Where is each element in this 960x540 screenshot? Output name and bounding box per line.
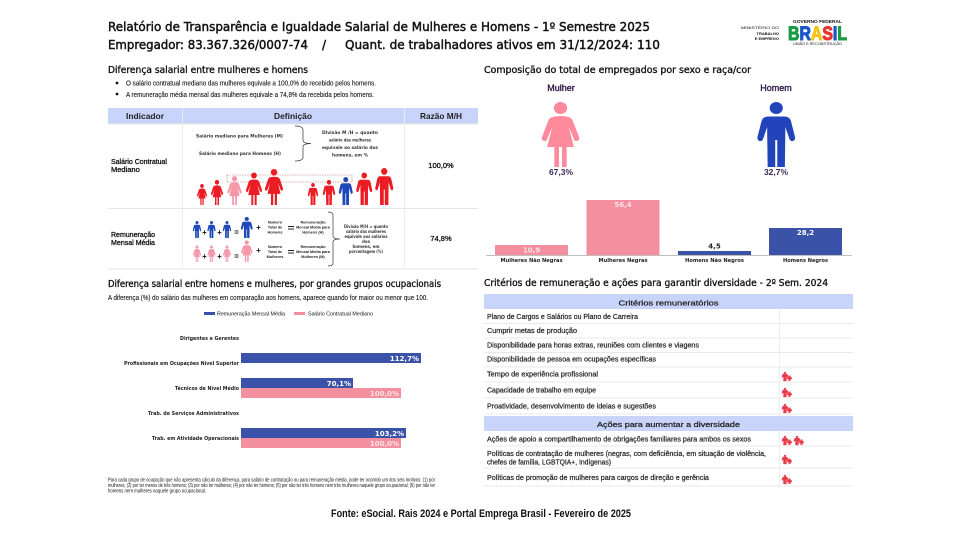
table: indicadores: 74,8% <box>430 234 452 243</box>
table: critérios e ações: Critérios remuneratórios <box>618 298 719 308</box>
bar chart: grupos ocupacionais: Trab. em Atividade Operacionais <box>152 436 240 442</box>
pictogram: mulher <box>542 83 579 177</box>
bar chart: grupos ocupacionais: 100,0% <box>370 390 399 398</box>
logo: ministério e governo federal: UNIÃO E RECONSTRUÇÃO <box>793 41 842 46</box>
pictogram: homem: 32,7% <box>764 167 788 177</box>
table: critérios e ações: Capacidade de trabalho em equipe <box>487 388 596 394</box>
title <box>108 20 660 52</box>
definição: remuneração mensal média: homens, em <box>352 244 380 250</box>
footnote: homens nem mulheres naquele grupo ocupacional. <box>108 488 206 494</box>
bar chart: grupos ocupacionais <box>124 312 421 448</box>
legend <box>204 312 373 318</box>
definição: remuneração mensal média: Remuneração <box>300 220 326 224</box>
title: Relatório de Transparência e Igualdade Salarial de Mulheres e Homens - 1º Semestre 2025 <box>108 20 650 34</box>
column chart: sexo e raça/cor: 10,9 <box>523 246 540 254</box>
icons: homem e mulher <box>782 372 804 484</box>
definição: remuneração mensal média: Remuneração <box>300 245 326 249</box>
title: / <box>322 38 327 52</box>
table: critérios e ações: Ações de apoio a compartilhamento de obrigações familiares para ambos os sexos <box>487 436 752 444</box>
definição: remuneração mensal média: Mulheres (M) <box>301 255 325 259</box>
logo: ministério e governo federal: GOVERNO FEDERAL <box>793 19 842 24</box>
definição: remuneração mensal média: = <box>234 228 239 237</box>
footnote <box>108 478 435 494</box>
definição: remuneração mensal média: + <box>217 228 222 237</box>
definição: remuneração mensal média: porcentagem (%) <box>349 249 383 255</box>
bar chart: grupos ocupacionais: Técnicos de Nível Médio <box>175 385 239 392</box>
source: Fonte: eSocial. Rais 2024 e Portal Emprega Brasil - Fevereiro de 2025 <box>331 508 631 520</box>
pictogram: mulher: 67,3% <box>549 167 573 177</box>
bar chart: grupos ocupacionais: 112,7% <box>390 355 419 363</box>
definição: remuneração mensal média: + <box>202 252 207 261</box>
table: indicadores: Salário Contratual <box>111 157 167 166</box>
summary bullets: O salário contratual mediano das mulheres equivale a 100,0% do recebido pelos homens. <box>126 78 376 88</box>
definição: remuneração mensal média: Total de <box>268 250 282 254</box>
footnote: mulheres; (2) por ter menos de três homens; (3) por não ter mulheres; (4) por não ter homens; (5) por não ter três homens nem três mulheres naquele grupo ocupacional; (6) por não ter <box>108 483 435 489</box>
bar chart: grupos ocupacionais: 103,2% <box>375 430 404 438</box>
column chart: sexo e raça/cor: 28,2 <box>797 229 814 237</box>
title: Empregador: 83.367.326/0007-74 <box>108 38 308 52</box>
column chart: sexo e raça/cor <box>486 200 852 264</box>
pictogram: mulher: Mulher <box>547 83 575 93</box>
definição: salário contratual mediano: Salário mediano para Mulheres (M) <box>196 132 283 140</box>
logo: ministério e governo federal: BRASIL <box>788 24 847 45</box>
subtitle: grupos ocupacionais: A diferença (%) do salário das mulheres em comparação aos homens, aparece quando for maior ou menor que 100. <box>108 293 428 302</box>
heading: diferença salarial: Diferença salarial entre mulheres e homens <box>108 65 308 76</box>
logo: ministério e governo federal: E EMPREGO <box>755 36 779 41</box>
column chart: sexo e raça/cor: Homens Não Negros <box>685 258 745 264</box>
definição: remuneração mensal média: salário das mulheres <box>346 228 386 235</box>
definição: remuneração mensal média: Homens <box>268 230 282 234</box>
heading: composição: Composição do total de empregados por sexo e raça/cor <box>484 65 751 76</box>
footnote: Para cada grupo de ocupação que não apresenta cálculo da diferença, para salário de contratação ou para remuneração média, pode ter ocorrido um dos seis motivos: (1) por <box>108 478 435 484</box>
table: critérios e ações: Ações para aumentar a diversidade <box>597 420 740 429</box>
table: indicadores: Razão M/H <box>420 111 462 121</box>
table: indicadores: Indicador <box>126 111 165 121</box>
table: critérios e ações: Disponibilidade para horas extras, reuniões com clientes e viagens <box>487 342 699 350</box>
table: indicadores: Definição <box>274 111 312 121</box>
table: critérios e ações: Cumprir metas de produção <box>487 328 577 335</box>
legend: Salário Contratual Mediano <box>308 312 373 318</box>
table: critérios e ações: chefes de família, LGBTQIA+, Indígenas) <box>487 460 611 466</box>
column chart: sexo e raça/cor: Mulheres Negras <box>598 258 648 264</box>
definição: remuneração mensal média: Mulheres <box>267 255 283 259</box>
definição: salário contratual mediano: salário das mulheres <box>329 136 371 144</box>
pictogram: homem <box>757 83 795 177</box>
definição: salário contratual mediano: homens, em % <box>332 152 368 158</box>
logo: ministério e governo federal: TRABALHO <box>757 31 779 36</box>
bar chart: grupos ocupacionais: Trab. de Serviços Administrativos <box>148 411 240 417</box>
table: indicadores: Mensal Média <box>111 238 156 247</box>
definição: salário contratual mediano: Salário mediano para Homens (H) <box>199 150 281 157</box>
definição: remuneração mensal média: Mensal Média para <box>296 250 331 254</box>
table: indicadores <box>108 108 478 269</box>
definição: remuneração mensal média: Número <box>268 220 283 224</box>
definição: remuneração mensal média: = <box>234 252 239 261</box>
logo: ministério e governo federal: MINISTÉRIO DO <box>741 25 779 30</box>
bar chart: grupos ocupacionais: Dirigentes e Gerentes <box>180 336 240 342</box>
table: critérios e ações <box>484 294 853 486</box>
definição: remuneração mensal média: equivale aos salários <box>344 233 388 240</box>
table: indicadores: Remuneração <box>111 230 155 239</box>
definição: remuneração mensal média: + <box>256 223 261 232</box>
definição: remuneração mensal média: + <box>202 228 207 237</box>
pictogram: homem: Homem <box>760 83 792 93</box>
definição: salário contratual mediano: equivale ao salário dos <box>322 144 378 151</box>
table: critérios e ações: Proatividade, desenvolvimento de ideias e sugestões <box>487 404 657 410</box>
bar chart: grupos ocupacionais: Profissionais em Ocupações Nível Superior <box>124 360 239 367</box>
table: critérios e ações: Tempo de experiência profissional <box>487 372 598 378</box>
table: critérios e ações: Plano de Cargos e Salários ou Plano de Carreira <box>487 314 638 321</box>
summary bullets <box>116 78 376 99</box>
table: critérios e ações: Políticas de contratação de mulheres (negras, com deficiência, em situação de violência, <box>487 451 766 458</box>
title: Quant. de trabalhadores ativos em 31/12/2024: 110 <box>345 38 660 52</box>
logo: ministério e governo federal <box>741 19 847 46</box>
definição: remuneração mensal média: Total de <box>268 226 282 230</box>
heading: critérios: Critérios de remuneração e ações para garantir diversidade - 2º Sem. 2024 <box>484 278 828 289</box>
definição: remuneração mensal média: Divisão M/H = quanto <box>344 224 388 230</box>
column chart: sexo e raça/cor: 4,5 <box>708 242 721 250</box>
table: critérios e ações: Políticas de promoção de mulheres para cargos de direção e gerência <box>487 475 709 482</box>
column chart: sexo e raça/cor: Mulheres Não Negras <box>500 258 563 264</box>
column chart: sexo e raça/cor: 56,4 <box>614 201 632 209</box>
definição: remuneração mensal média: Mensal Média para <box>296 226 331 230</box>
definição: remuneração mensal média: + <box>256 246 261 255</box>
definição: salário contratual mediano <box>196 126 393 205</box>
definição: remuneração mensal média: Número <box>268 245 283 249</box>
bar chart: grupos ocupacionais: 100,0% <box>370 440 399 448</box>
definição: remuneração mensal média: + <box>217 252 222 261</box>
summary bullets: A remuneração média mensal das mulheres equivale a 74,8% da recebida pelos homens. <box>126 90 374 99</box>
definição: remuneração mensal média: Homens (H) <box>302 230 324 234</box>
heading: por grandes grupos ocupacionais: Diferença salarial entre homens e mulheres, por grandes grupos ocupacionais <box>108 279 441 290</box>
table: indicadores: Mediano <box>111 165 140 174</box>
column chart: sexo e raça/cor: Homens Negros <box>783 258 829 264</box>
definição: remuneração mensal média: dos <box>362 239 370 245</box>
table: critérios e ações: Disponibilidade de pessoa em ocupações específicas <box>487 356 656 364</box>
bar chart: grupos ocupacionais: 70,1% <box>327 380 351 388</box>
definição: salário contratual mediano: Divisão M /H = quanto <box>322 130 378 136</box>
legend: Remuneração Mensal Média <box>217 312 285 318</box>
definição: remuneração mensal média <box>193 212 388 266</box>
table: indicadores: 100,0% <box>428 161 454 170</box>
